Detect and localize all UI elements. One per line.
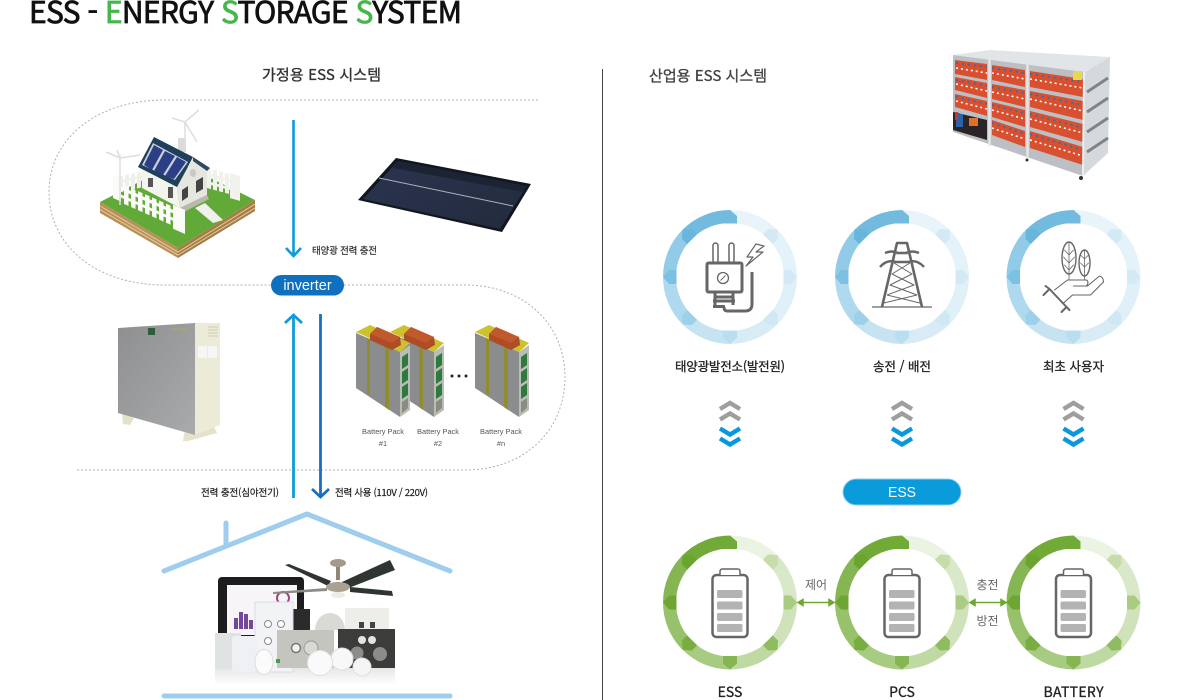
icon: battery	[884, 569, 920, 637]
icon: battery	[712, 569, 748, 637]
arrow: charging up	[285, 315, 302, 498]
battery pack labels: Battery Pack	[417, 427, 459, 436]
ESS pill: ESS	[888, 484, 916, 501]
arrow: usage down	[312, 314, 329, 497]
battery pack labels: Battery Pack	[362, 427, 404, 436]
image: industrial battery rack	[953, 50, 1110, 180]
arrow: PCS to battery	[970, 600, 1006, 606]
image: house with solar roof	[100, 110, 255, 258]
ring: end user	[988, 191, 1159, 363]
label: solar plant: 태양광발전소(발전원)	[675, 356, 785, 375]
image: smart home devices	[215, 559, 395, 685]
panel: home ESS system	[49, 64, 565, 696]
battery pack labels: #1	[379, 439, 387, 448]
ESS pill	[843, 479, 961, 505]
divider	[602, 69, 604, 700]
image: home ESS cabinet	[118, 323, 220, 441]
label: power usage: 전력 사용 (110V / 220V)	[335, 485, 428, 499]
icon: plug	[707, 243, 764, 311]
heading: home ESS: 가정용 ESS 시스템	[262, 64, 381, 85]
image: home ESS cabinet: enopac	[171, 327, 188, 333]
back fences	[207, 167, 240, 201]
panel: industrial ESS system	[644, 50, 1159, 700]
inverter pill	[271, 275, 344, 296]
label: solar charging: 태양광 전력 충전	[312, 243, 377, 257]
chevrons: end user	[1064, 403, 1084, 444]
label: control: 제어	[805, 576, 827, 593]
label: charge: 충전	[976, 576, 999, 593]
image: solar panel	[358, 158, 531, 232]
label: night charging: 전력 충전(심야전기)	[201, 485, 279, 499]
battery pack labels: #n	[497, 439, 505, 448]
chevrons: solar plant	[720, 403, 740, 444]
label: discharge: 방전	[976, 612, 999, 629]
icon: pylon	[872, 243, 932, 307]
inverter pill: inverter	[283, 278, 332, 294]
dashed flow outline	[49, 100, 565, 470]
chevrons: transmission	[892, 403, 912, 444]
row: power supply chain	[644, 191, 1159, 444]
front fence	[113, 174, 185, 234]
ring: solar plant	[644, 191, 816, 363]
battery pack labels	[362, 427, 522, 448]
ring: ESS	[644, 517, 816, 688]
arrow: ESS to PCS	[798, 600, 834, 606]
ring: transmission	[816, 191, 988, 363]
icon: house outline	[164, 514, 450, 696]
label: transmission: 송전 / 배전	[873, 356, 931, 375]
label: end user: 최초 사용자	[1043, 356, 1104, 375]
icon: battery	[1056, 569, 1091, 637]
ring: PCS	[816, 517, 988, 688]
row: ESS components	[644, 517, 1159, 700]
ring: battery	[988, 517, 1159, 688]
battery pack labels: #2	[434, 439, 442, 448]
battery pack labels: Battery Pack	[480, 427, 522, 436]
image: battery packs	[356, 325, 529, 417]
icon: hand with plants	[1044, 242, 1104, 312]
arrow: solar charging	[286, 120, 301, 256]
heading: industrial ESS: 산업용 ESS 시스템	[649, 65, 767, 86]
